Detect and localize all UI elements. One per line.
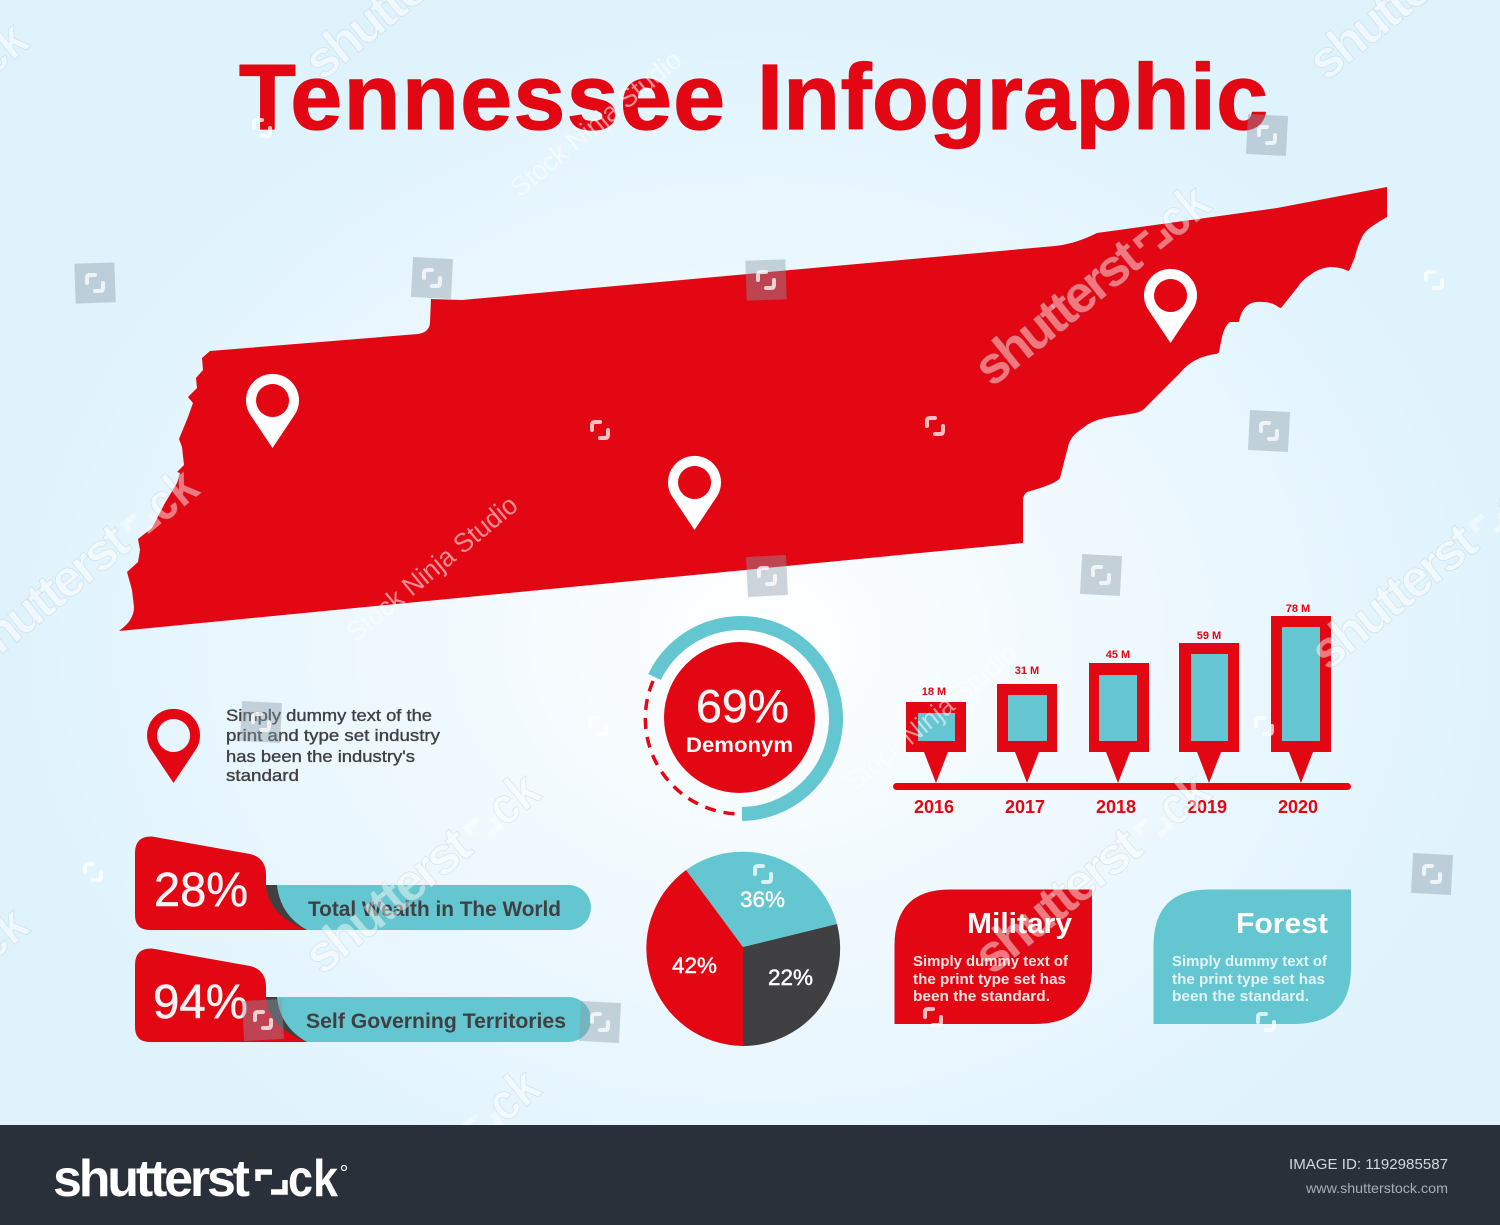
gauge dashed remainder — [645, 681, 741, 814]
footer logo: ck — [288, 1150, 338, 1208]
dark fold — [260, 997, 307, 1042]
legend text: print and type set industry — [226, 726, 441, 745]
footer website: www.shutterstock.com — [1305, 1180, 1448, 1196]
bar 2020: 2020 — [1278, 797, 1318, 817]
percentage: 94% — [153, 976, 248, 1029]
card body: the print type set has — [1172, 972, 1325, 988]
bar 2017: 2017 — [1005, 797, 1045, 817]
footer logo: shutterst — [53, 1150, 250, 1208]
icon: map pin west — [246, 374, 299, 448]
dark fold — [260, 885, 307, 930]
pie labels — [672, 887, 813, 990]
icon: red pin — [147, 709, 200, 783]
slice teal 36 — [686, 852, 837, 947]
bar 2019: 2019 — [1187, 797, 1227, 817]
watermark overlay: ck — [1146, 761, 1221, 837]
gauge value: 69% — [696, 680, 789, 732]
card: military — [894, 890, 1092, 1024]
bar 2018: 2018 — [1096, 797, 1136, 817]
watermark overlay: ck — [1146, 173, 1221, 249]
watermark overlay: shutterst — [1299, 512, 1489, 681]
title: Infographic — [757, 45, 1268, 149]
card heading: Military — [967, 908, 1072, 940]
map: Tennessee state shape — [119, 187, 1387, 631]
gauge label: Demonym — [686, 734, 793, 757]
card body: been the standard. — [1172, 989, 1309, 1005]
card body: been the standard. — [913, 989, 1050, 1005]
bar 2020: 78 M — [1286, 603, 1310, 615]
watermark overlay: Stock Ninja Studio — [840, 639, 1022, 797]
bar 2017 — [997, 665, 1057, 817]
watermark overlay: ck — [476, 1057, 551, 1133]
card: forest — [1154, 890, 1351, 1024]
watermark overlay: shutterst — [963, 816, 1153, 985]
bar 2016: 18 M — [922, 686, 946, 698]
watermark overlay: Stock Ninja Studio — [505, 45, 687, 203]
card heading: Forest — [1236, 908, 1328, 940]
footer image id: IMAGE ID: 1192985587 — [1289, 1156, 1448, 1173]
pie chart — [646, 852, 840, 1046]
legend: pin with description — [147, 706, 441, 785]
card body: Simply dummy text of — [913, 954, 1068, 970]
red tab — [135, 948, 307, 1042]
card body: the print type set has — [913, 972, 1066, 988]
watermark overlay: shutterst — [293, 816, 483, 985]
footer logo — [53, 1150, 346, 1208]
tab label: Self Governing Territories — [306, 1009, 566, 1033]
watermark overlay: shutterst — [963, 228, 1153, 397]
slice dark 22 — [743, 924, 840, 1046]
bar 2016 — [906, 686, 966, 817]
title: Tennessee — [239, 45, 725, 149]
bar 2019: 59 M — [1197, 630, 1221, 642]
watermark overlay: ck — [134, 457, 209, 533]
bar 2020 — [1271, 603, 1331, 817]
footer bar — [0, 1125, 1500, 1225]
card body — [913, 954, 1068, 1005]
legend text — [226, 706, 441, 785]
watermark overlay: ck — [476, 761, 551, 837]
bar 2016: 2016 — [914, 797, 954, 817]
donut gauge: demonym — [645, 623, 836, 814]
stat tab: total wealth — [135, 836, 591, 930]
teal bar — [266, 997, 591, 1042]
legend text: standard — [226, 766, 299, 785]
red tab — [135, 836, 307, 930]
card body: Simply dummy text of — [1172, 954, 1327, 970]
teal bar — [266, 885, 591, 930]
pie labels: 36% — [740, 887, 785, 912]
title — [239, 45, 1268, 149]
legend text: has been the industry's — [226, 747, 415, 766]
watermark overlay: Stock Ninja Studio — [341, 490, 523, 648]
bar 2018 — [1089, 649, 1149, 817]
tab label: Total Wealth in The World — [308, 897, 561, 921]
bar 2019 — [1179, 630, 1239, 817]
icon: map pin middle — [668, 456, 721, 530]
gauge teal arc — [654, 623, 836, 814]
bar chart: yearly pins — [893, 603, 1351, 817]
gauge center disc — [664, 642, 815, 793]
baseline axis — [893, 783, 1351, 790]
bar 2018: 45 M — [1106, 649, 1130, 661]
percentage: 28% — [154, 864, 248, 917]
pie labels: 42% — [672, 953, 717, 978]
slice red 42 — [646, 870, 743, 1046]
icon: map pin east — [1144, 269, 1197, 343]
bar 2017: 31 M — [1015, 665, 1039, 677]
stat tab: self governing territories — [135, 948, 591, 1042]
card body — [1172, 954, 1327, 1005]
pie labels: 22% — [768, 965, 813, 990]
legend text: Simply dummy text of the — [226, 706, 432, 725]
